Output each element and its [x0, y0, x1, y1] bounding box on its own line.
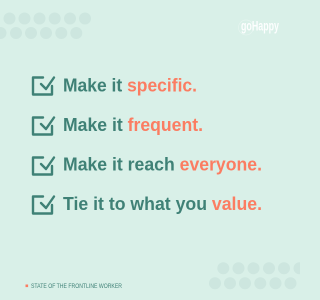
text: make it frequent: Make it frequent. — [63, 114, 203, 135]
icon: checkbox 4 — [33, 196, 54, 214]
text: tie it to what you value: Tie it to what you value. — [63, 193, 262, 214]
footer label: STATE OF THE FRONTLINE WORKER — [31, 283, 122, 290]
text: make it reach everyone: Make it reach everyone. — [63, 154, 262, 175]
text: make it specific: Make it specific. — [63, 74, 197, 95]
dot pattern: top left — [0, 12, 91, 39]
footer bullet — [26, 284, 28, 287]
icon: checkbox 1 — [33, 78, 54, 94]
list item 1 — [33, 74, 197, 95]
list item 4 — [33, 193, 262, 214]
dot pattern: bottom right — [209, 262, 306, 289]
icon: checkbox 3 — [33, 158, 54, 174]
footer — [26, 283, 122, 290]
list item 3 — [33, 154, 262, 175]
logo: goHappy — [238, 18, 279, 35]
logo: goHappy: goHappy — [241, 18, 279, 34]
icon: checkbox 2 — [33, 118, 54, 134]
list item 2 — [33, 114, 203, 135]
